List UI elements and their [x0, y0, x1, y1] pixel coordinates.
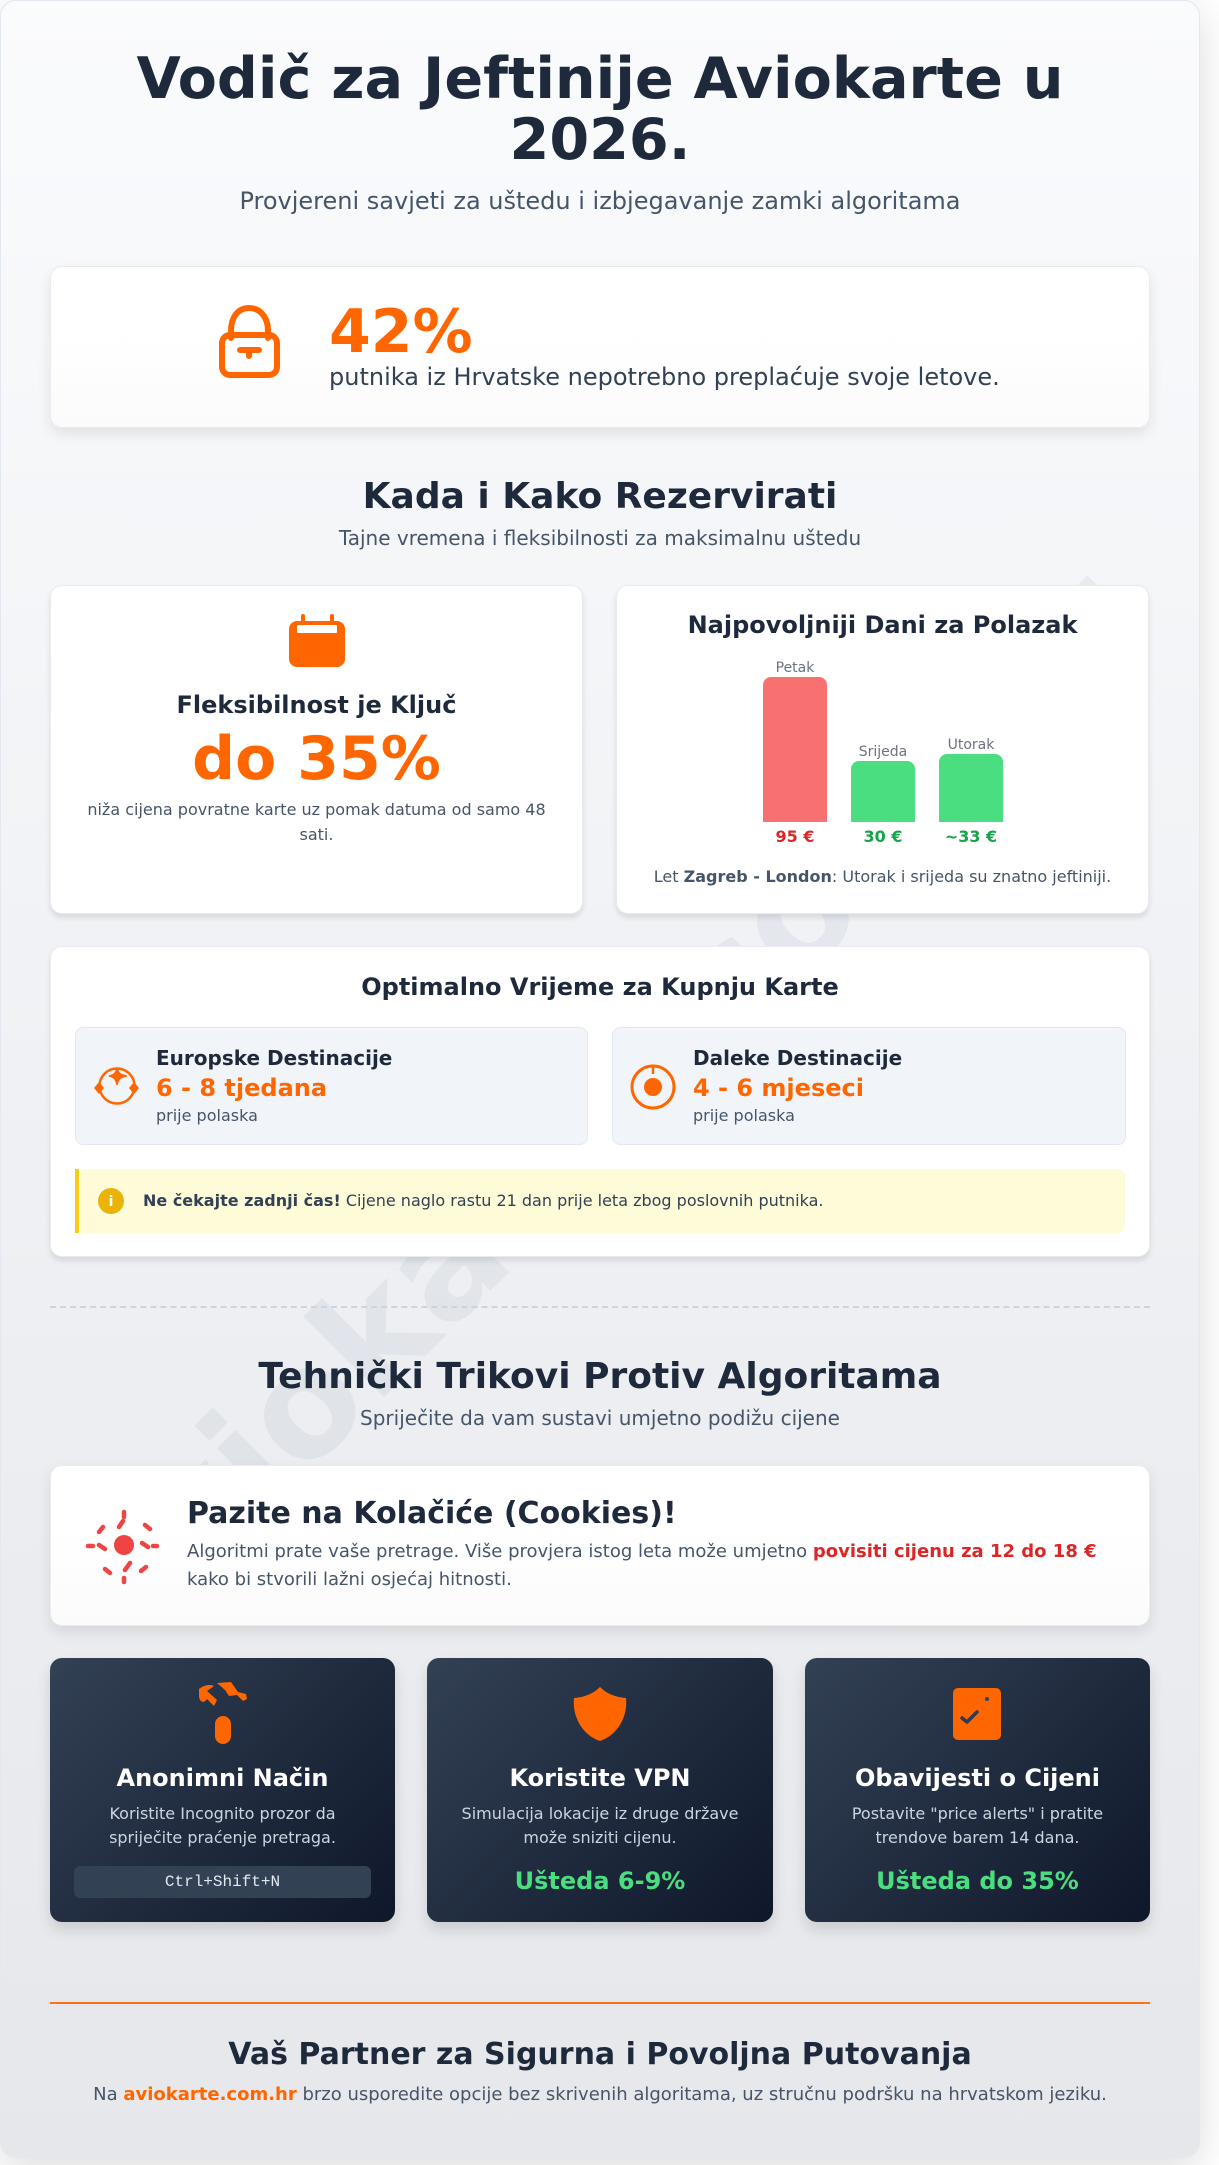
footer text: Na aviokarte.com.hr brzo usporedite opcije bez skrivenih algoritama, uz stručnu podršku na hrvatskom jeziku. [93, 2084, 1107, 2105]
icon: globe [94, 1067, 139, 1105]
title: 2026. [510, 107, 690, 173]
stat text: putnika iz Hrvatske nepotrebno preplaćuje svoje letove. [329, 363, 1000, 391]
note: prije polaska [156, 1106, 258, 1125]
heading: Anonimni Način [117, 1764, 328, 1792]
icon: info [98, 1188, 124, 1214]
label: Europske Destinacije [156, 1046, 392, 1070]
footer heading: Vaš Partner za Sigurna i Povoljna Putovanja [228, 2037, 972, 2072]
saving: Ušteda do 35% [876, 1867, 1079, 1895]
section subtitle: Tajne vremena i fleksibilnosti za maksimalnu uštedu [339, 526, 861, 550]
card: VPN [427, 1658, 773, 1922]
heading: Kada i Kako Rezervirati: Kada i Kako Rezervirati [363, 476, 837, 517]
callout: warning [75, 1169, 1125, 1233]
bar chart [763, 660, 1003, 846]
far destinations [612, 1027, 1126, 1145]
subtitle: Provjereni savjeti za uštedu i izbjegavanje zamki algoritama [239, 187, 961, 215]
description [109, 1804, 336, 1847]
value: 4 - 6 mjeseci [693, 1074, 864, 1102]
icon: target [630, 1064, 676, 1110]
shortcut [74, 1866, 371, 1898]
description: može sniziti cijenu. [523, 1828, 677, 1847]
note: prije polaska [693, 1106, 795, 1125]
card heading: Optimalno Vrijeme za Kupnju Karte [361, 973, 839, 1001]
chart note: Let Zagreb - London: Utorak i srijeda su znatno jeftiniji. [654, 867, 1111, 886]
panel: optimal purchase time [50, 946, 1150, 1257]
bar: Srijeda [851, 761, 915, 822]
big number: do 35% [192, 724, 441, 794]
description: Postavite "price alerts" i pratite [852, 1804, 1103, 1823]
description: Simulacija lokacije iz druge države [462, 1804, 738, 1823]
description [462, 1804, 738, 1847]
saving: Ušteda 6-9% [515, 1867, 685, 1895]
description: Koristite Incognito prozor da [109, 1804, 336, 1823]
icon: calendar [289, 614, 345, 667]
description: sati. [300, 825, 333, 844]
card heading: Fleksibilnost je Ključ [177, 691, 456, 719]
icon: incognito [199, 1682, 247, 1744]
card: price alerts [805, 1658, 1150, 1922]
bar values: 95 € [776, 827, 814, 846]
European destinations [75, 1027, 588, 1145]
icon: lock [219, 305, 280, 378]
description [852, 1804, 1103, 1847]
heading: Koristite VPN [509, 1764, 691, 1792]
bar: Petak [763, 677, 827, 822]
callout: warning: i [109, 1194, 113, 1210]
shortcut: Ctrl+Shift+N [165, 1873, 280, 1891]
bar labels: Petak [776, 660, 814, 676]
icon: cookie burst [86, 1510, 160, 1584]
heading: Tehnički Trikovi: Tehnički Trikovi Protiv Algoritama [258, 1356, 942, 1397]
description [187, 1540, 1097, 1590]
icon: checklist [953, 1688, 1001, 1740]
description: trendove barem 14 dana. [876, 1828, 1079, 1847]
value: 6 - 8 tjedana [156, 1074, 327, 1102]
label: Daleke Destinacije [693, 1046, 902, 1070]
title: Vodič za Jeftinije Aviokarte u [136, 46, 1064, 112]
panel: flexibility [50, 585, 583, 914]
description: niža cijena povratne karte uz pomak datuma od samo 48 [87, 800, 546, 819]
panel: cookies [50, 1465, 1150, 1626]
description: Algoritmi prate vaše pretrage. Više provjera istog leta može umjetno povisiti cijenu za 12 do 18 € [187, 1540, 1097, 1562]
section subtitle: Spriječite da vam sustavi umjetno podižu cijene [360, 1406, 840, 1430]
bar chart: ~33 € [945, 827, 997, 846]
callout text: Ne čekajte zadnji čas! Cijene naglo rastu 21 dan prije leta zbog poslovnih putnika. [143, 1191, 824, 1210]
description: spriječite praćenje pretraga. [109, 1828, 336, 1847]
description: kako bi stvorili lažni osjećaj hitnosti. [187, 1568, 512, 1590]
heading: Obavijesti o Cijeni [855, 1764, 1100, 1792]
icon: shield [574, 1687, 626, 1741]
card: incognito [50, 1658, 395, 1922]
bar chart: 30 € [864, 827, 902, 846]
stat number: 42% [329, 297, 473, 367]
bar chart: Srijeda [859, 744, 907, 760]
heading: Pazite na Kolačiće (Cookies)! [187, 1496, 677, 1531]
panel: cheapest days [616, 585, 1149, 914]
bar: Utorak [939, 754, 1003, 822]
description [87, 800, 546, 844]
card heading: Najpovoljniji Dani za Polazak [688, 611, 1077, 639]
bar chart: Utorak [948, 737, 994, 753]
panel: 42% stat [50, 266, 1150, 428]
title [136, 46, 1064, 173]
